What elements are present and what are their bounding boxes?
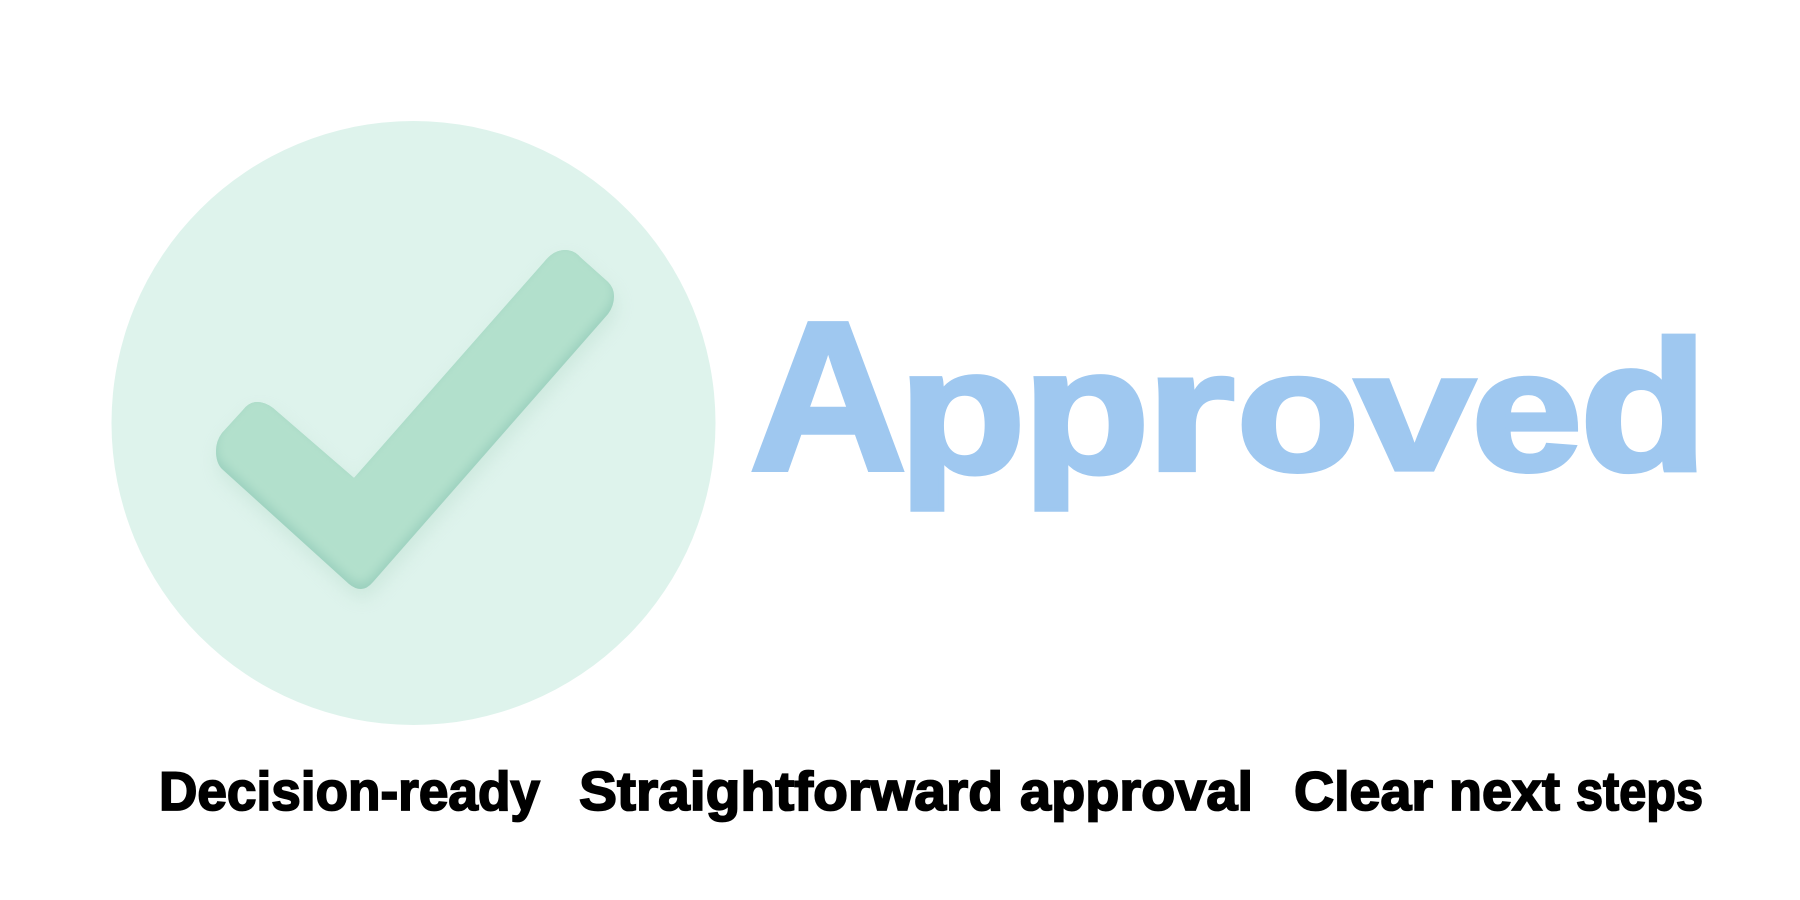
tagline: Clear next steps bbox=[1294, 760, 1703, 822]
tagline: Straightforward approval: approval bbox=[1020, 760, 1253, 822]
tagline: Clear next steps: steps bbox=[1576, 760, 1703, 822]
title: Approved: A bbox=[749, 277, 907, 515]
title: Approved: d bbox=[1580, 302, 1708, 509]
circle background bbox=[112, 121, 716, 725]
title: Approved: e bbox=[1472, 316, 1582, 507]
tagline: Straightforward approval: Straightforward bbox=[579, 760, 1003, 822]
tagline: Clear next steps: next bbox=[1449, 760, 1560, 822]
title: Approved: p bbox=[1023, 313, 1150, 511]
tagline: Clear next steps: Clear bbox=[1294, 760, 1433, 822]
tagline: Straightforward approval bbox=[579, 760, 1253, 822]
title: Approved: r bbox=[1145, 316, 1235, 506]
tagline: Decision-ready: Decision-ready bbox=[159, 760, 540, 822]
title: Approved bbox=[749, 277, 1708, 515]
title: Approved: p bbox=[899, 313, 1026, 511]
title: Approved: o bbox=[1236, 315, 1359, 507]
title: Approved: v bbox=[1355, 318, 1475, 506]
check mark bbox=[216, 244, 616, 598]
icon: approved check mark in circle bbox=[112, 121, 716, 725]
